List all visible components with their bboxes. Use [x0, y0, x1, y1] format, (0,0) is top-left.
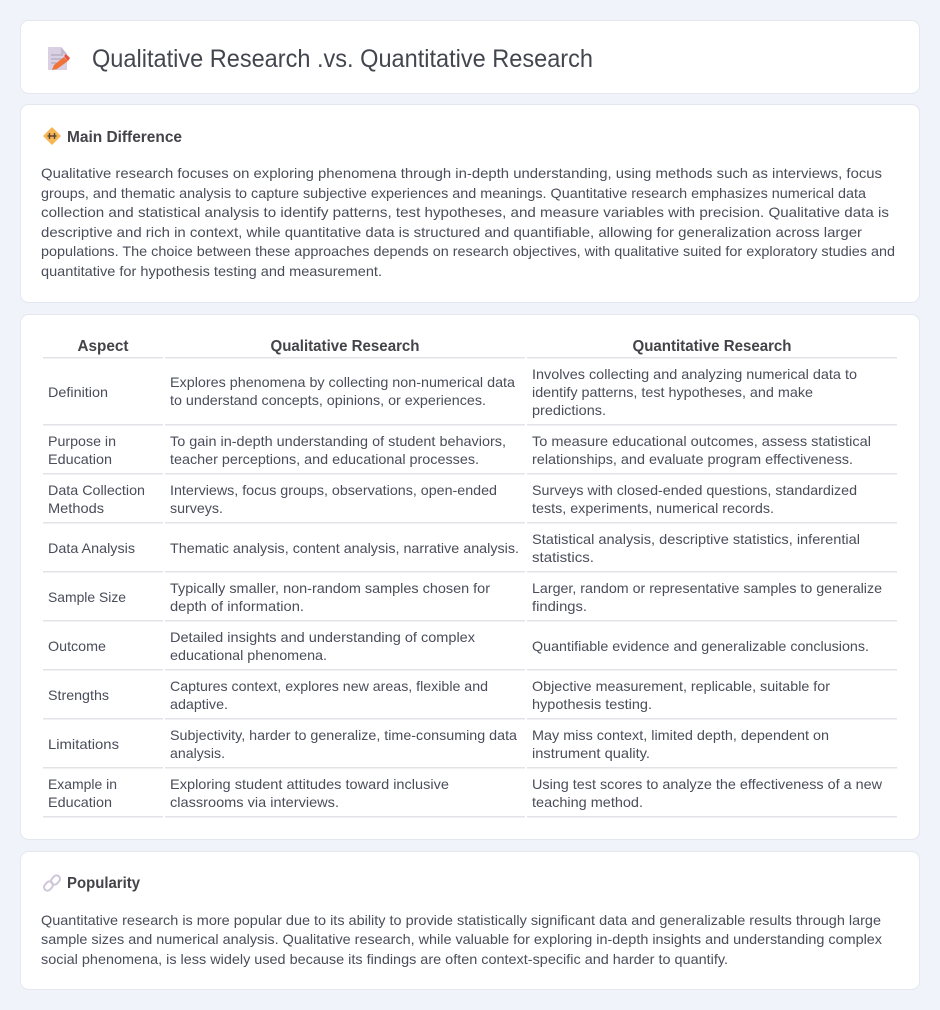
row: data collection methods: Methods [48, 500, 104, 516]
row: example in education: teaching method. [532, 794, 643, 810]
title: Qualitative Research .vs. Quantitative Research [92, 45, 593, 73]
row: sample size: Larger, random or representative samples to generalize [532, 580, 882, 596]
text block: popularity paragraph [41, 912, 882, 967]
row: data collection methods: tests, experiments, numerical records. [532, 500, 774, 516]
row: data analysis: Statistical analysis, descriptive statistics, inferential [532, 531, 860, 547]
row: limitations: Limitations [48, 736, 119, 752]
text block: main difference paragraph: collection and statistical analysis to identify patterns, test hypotheses, and measure variables with precision. Qualitative data is [41, 204, 889, 220]
panel: main difference [20, 104, 920, 302]
row: definition: predictions. [532, 402, 606, 418]
row: data collection methods: Interviews, focus groups, observations, open-ended [170, 482, 497, 498]
text block: main difference paragraph: populations. The choice between these approaches depends on research objectives, with qualitative suited for exploratory studies and [41, 243, 895, 259]
row: outcome: educational phenomena. [170, 647, 327, 663]
text block: main difference paragraph: quantitative for hypothesis testing and measurement. [41, 263, 382, 279]
text block: main difference paragraph: descriptive and rich in context, while quantitative data is structured and quantifiable, allowing for generalization across larger [41, 224, 862, 240]
row: purpose in education: relationships, and evaluate program effectiveness. [532, 451, 853, 467]
row: outcome: Outcome [48, 638, 106, 654]
icon: warning diamond [44, 128, 60, 144]
row: definition [43, 366, 897, 426]
row: sample size: depth of information. [170, 598, 304, 614]
heading: popularity: Popularity [67, 875, 140, 892]
row: data analysis [43, 531, 897, 572]
row: limitations: analysis. [170, 745, 225, 761]
row: example in education: Using test scores to analyze the effectiveness of a new [532, 776, 883, 792]
row: purpose in education [43, 433, 897, 474]
table header row: Qualitative Research [270, 338, 420, 355]
row: example in education: Education [48, 794, 112, 810]
row: purpose in education: To measure educational outcomes, assess statistical [532, 433, 871, 449]
table header row: Aspect [78, 338, 129, 355]
row: purpose in education: Education [48, 451, 112, 467]
row: example in education [43, 776, 897, 818]
row: definition: Definition [48, 384, 108, 400]
row: definition: Involves collecting and analyzing numerical data to [532, 366, 857, 382]
text block: main difference paragraph: groups, and thematic analysis to capture subjective experiences and meanings. Quantitative research emphasizes numerical data [41, 185, 866, 201]
row: outcome: Quantifiable evidence and generalizable conclusions. [532, 638, 869, 654]
row: purpose in education: teacher perceptions, and educational processes. [170, 451, 479, 467]
row: definition: to understand concepts, opinions, or experiences. [170, 392, 486, 408]
panel: popularity [20, 852, 920, 990]
row: data analysis: Thematic analysis, content analysis, narrative analysis. [170, 540, 519, 556]
heading: main difference: Main Difference [67, 129, 182, 146]
panel: comparison table [20, 314, 920, 840]
row: data collection methods: surveys. [170, 500, 223, 516]
row: data analysis: Data Analysis [48, 540, 135, 556]
row: limitations: Subjectivity, harder to generalize, time-consuming data [170, 727, 517, 743]
row: sample size: Sample Size [48, 589, 126, 605]
row: definition: identify patterns, test hypotheses, and make [532, 384, 813, 400]
text block: popularity paragraph: Quantitative research is more popular due to its ability to provide statistically significant data and generalizable results through large [41, 912, 881, 928]
row: strengths: Objective measurement, replicable, suitable for [532, 678, 830, 694]
text block: popularity paragraph: sample sizes and numerical analysis. Qualitative research, while valuable for exploring in-depth insights and understanding complex [41, 931, 882, 947]
row: strengths [43, 678, 897, 720]
row: purpose in education: To gain in-depth understanding of student behaviors, [170, 433, 506, 449]
text block: popularity paragraph: social phenomena, is less widely used because its findings are often context-specific and harder to quantify. [41, 951, 728, 967]
row: outcome [43, 629, 897, 670]
row: limitations [43, 727, 897, 768]
row: strengths: hypothesis testing. [532, 696, 652, 712]
icon: link [43, 874, 61, 892]
row: definition: Explores phenomena by collecting non-numerical data [170, 374, 515, 390]
row: limitations: instrument quality. [532, 745, 650, 761]
table header row: Quantitative Research [632, 338, 792, 355]
row: outcome: Detailed insights and understanding of complex [170, 629, 475, 645]
row: data collection methods: Data Collection [48, 482, 145, 498]
row: sample size: Typically smaller, non-random samples chosen for [170, 580, 490, 596]
row: example in education: classrooms via interviews. [170, 794, 339, 810]
row: example in education: Example in [48, 776, 117, 792]
icon: document with pencil [48, 47, 70, 70]
text block: main difference paragraph [41, 165, 895, 279]
row: data analysis: statistics. [532, 549, 594, 565]
row: sample size [43, 580, 897, 622]
row: strengths: Captures context, explores new areas, flexible and [170, 678, 488, 694]
row: limitations: May miss context, limited depth, dependent on [532, 727, 829, 743]
row: example in education: Exploring student attitudes toward inclusive [170, 776, 449, 792]
row: purpose in education: Purpose in [48, 433, 116, 449]
row: strengths: adaptive. [170, 696, 228, 712]
row: sample size: findings. [532, 598, 587, 614]
row: data collection methods [43, 482, 897, 524]
text block: main difference paragraph: Qualitative research focuses on exploring phenomena through in-depth understanding, using methods such as interviews, focus [41, 165, 882, 181]
table header row [43, 338, 897, 358]
row: data collection methods: Surveys with closed-ended questions, standardized [532, 482, 857, 498]
panel: header [20, 20, 920, 94]
row: strengths: Strengths [48, 687, 109, 703]
